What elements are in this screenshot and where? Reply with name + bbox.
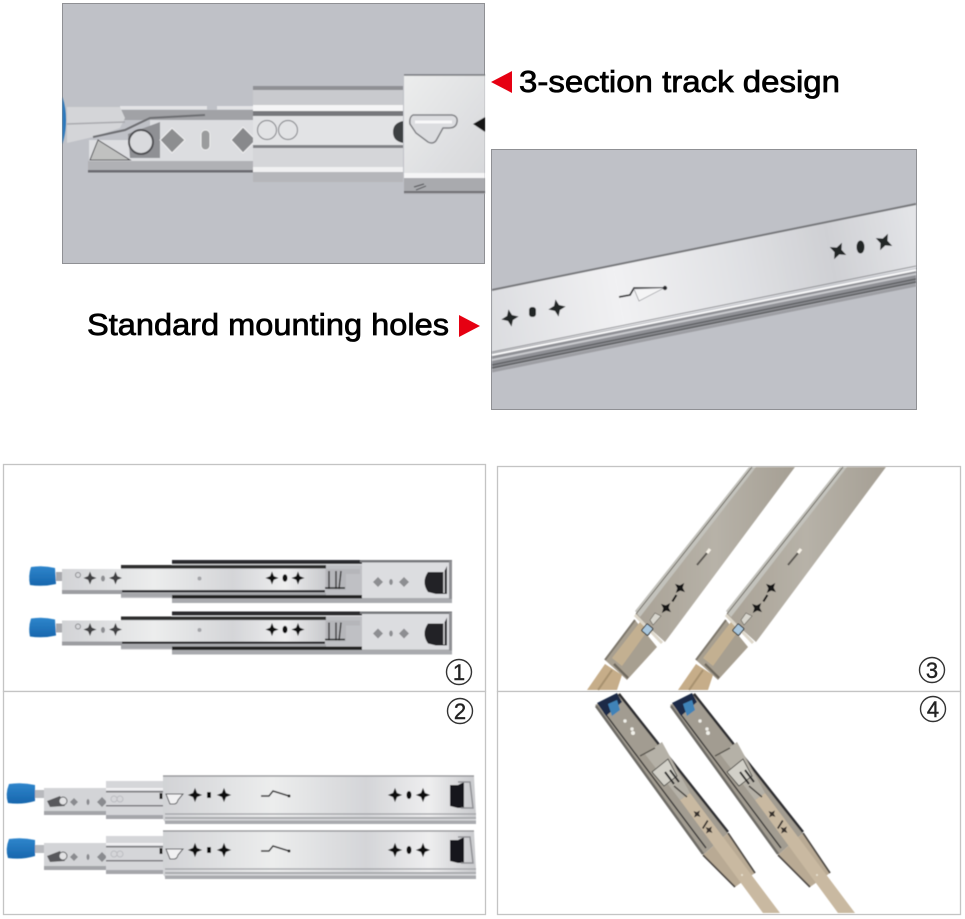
badge: 1: 1 xyxy=(453,660,465,685)
badge: 3 xyxy=(920,658,944,683)
panel: view 3 xyxy=(498,466,960,692)
panel: mounting holes photo xyxy=(492,150,916,410)
badge: 3: 3 xyxy=(926,658,938,683)
badge: 4 xyxy=(920,696,946,722)
panel: view 4 xyxy=(498,692,960,914)
photo: rail with mounting holes xyxy=(492,204,916,371)
blue knob edge xyxy=(62,97,66,144)
photo: slides extended xyxy=(7,776,476,879)
label: 3-section track design: 3-section track design xyxy=(519,64,840,99)
callout: 3-section track design xyxy=(491,64,840,99)
arrow: red pointer right xyxy=(459,315,480,337)
hook cut-out xyxy=(410,115,457,143)
photo: extended 3-section rail close-up xyxy=(62,75,485,194)
panel: view 1 xyxy=(4,464,486,692)
callout: standard mounting holes xyxy=(87,307,480,342)
photo: slides closed xyxy=(29,560,452,654)
photo: angled slides front xyxy=(587,467,886,690)
inner rail xyxy=(67,106,256,172)
badge: 1 xyxy=(446,660,472,685)
badge: 4: 4 xyxy=(927,697,939,722)
label: standard mounting holes: Standard mounting holes xyxy=(87,307,449,342)
panel: view 2 xyxy=(4,692,486,914)
photo: angled slides back xyxy=(595,693,855,913)
panel: 3-section track photo xyxy=(62,4,485,264)
arrow: red pointer left xyxy=(491,71,512,93)
badge: 2 xyxy=(448,698,472,724)
middle rail xyxy=(253,86,403,182)
outer rail xyxy=(404,75,485,194)
badge: 2: 2 xyxy=(454,699,466,724)
